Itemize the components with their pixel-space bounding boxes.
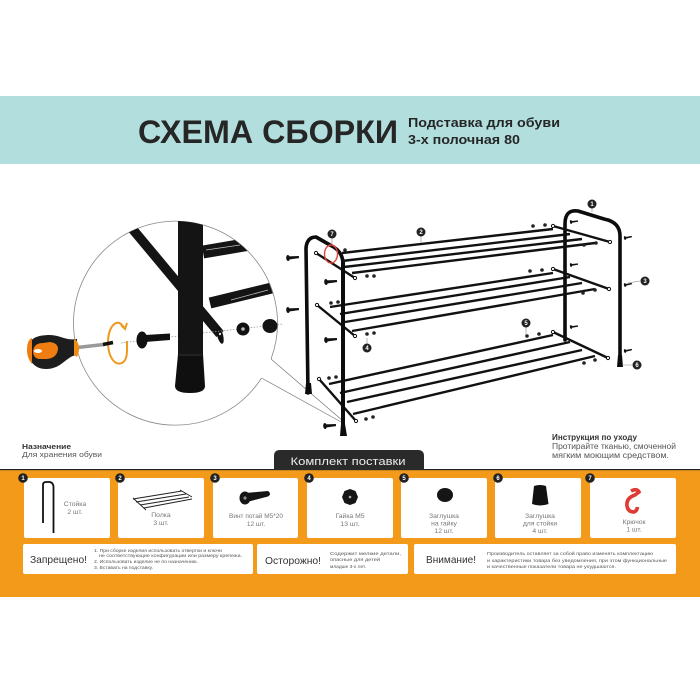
card 6: leg cap: для стойки	[523, 520, 557, 528]
magnified parts clipped to the lens	[130, 218, 276, 393]
care instructions: Протирайте тканью, смоченной	[552, 442, 676, 451]
number markers: 7	[330, 232, 334, 238]
subtitle: Подставка для обуви	[408, 115, 560, 130]
middle shelf	[317, 269, 609, 336]
card 3: screw: 3	[213, 476, 217, 482]
card 7: hook: Крючок	[623, 519, 646, 526]
number markers: 3	[643, 279, 647, 285]
card 1: upright	[18, 473, 110, 538]
subtitle: 3-х полочная 80	[408, 132, 520, 147]
card 5: nut cap: Заглушка	[429, 513, 459, 520]
notice: attention: и качественные показатели товара не ухудшаются.	[487, 564, 616, 569]
screwdriver	[27, 335, 113, 369]
nuts and caps	[327, 223, 598, 421]
notice: attention	[414, 544, 676, 574]
header band	[0, 96, 700, 164]
notice: forbidden: 2. Использовать изделие не по назначению.	[94, 559, 198, 564]
magnified detail circle	[27, 218, 343, 425]
notice: caution: младше 3-х лет.	[330, 564, 366, 570]
card 3: screw	[210, 473, 298, 538]
front upright and feet	[305, 262, 623, 436]
notice: caution: Содержит мелкие детали,	[330, 551, 401, 557]
top shelf	[316, 226, 610, 278]
number markers: 6	[635, 363, 639, 369]
rotation arrow	[108, 323, 127, 364]
notice: attention: Производитель оставляет за собой право изменять комплектацию	[487, 550, 654, 556]
card 2: shelf: 3 шт.	[153, 520, 169, 527]
number markers: 5	[524, 321, 528, 327]
title: СХЕМА СБОРКИ	[138, 114, 398, 150]
kit contents panel	[0, 450, 700, 597]
card 5: nut cap	[399, 473, 487, 538]
card 4: nut: 4	[307, 476, 311, 482]
card 4: nut: 13 шт.	[340, 521, 360, 528]
card 6: leg cap: Заглушка	[525, 513, 555, 520]
card 6: leg cap	[493, 473, 581, 538]
magnified screw	[136, 332, 170, 348]
hook	[324, 245, 338, 263]
purpose note: Назначение	[22, 442, 71, 451]
stand uprights rear	[306, 211, 620, 433]
notice: caution: опасные для детей	[330, 556, 380, 563]
card 1: upright: 2 шт.	[67, 509, 83, 516]
care instructions	[552, 433, 676, 460]
magnified cap	[262, 319, 278, 333]
purpose note: Для хранения обуви	[22, 450, 102, 459]
shoe rack diagram	[286, 200, 650, 436]
card 2: shelf: Полка	[151, 512, 171, 519]
bottom shelf	[319, 332, 608, 421]
notice: forbidden: 3. Вставать на подставку.	[94, 565, 153, 570]
notice: caution	[257, 544, 408, 574]
notice: attention: Внимание!	[426, 554, 476, 566]
card 1: upright: Стойка	[64, 500, 86, 508]
card 5: nut cap: 5	[402, 476, 406, 482]
card 6: leg cap: 4 шт.	[532, 528, 548, 535]
card 7: hook: 7	[588, 476, 592, 482]
card 4: nut: Гайка М5	[335, 512, 365, 520]
screws	[286, 219, 632, 429]
card 6: leg cap: 6	[496, 476, 500, 482]
card 2: shelf	[115, 473, 204, 538]
leader lines	[332, 208, 640, 365]
card 4: nut	[304, 473, 393, 538]
kit tab: Комплект поставки	[290, 456, 406, 468]
card 5: nut cap: на гайку	[431, 520, 457, 528]
notice: forbidden: не соответствующие конфигурации или размеру крепежа.	[99, 553, 242, 558]
dotted assembly axis	[121, 324, 283, 343]
card 7: hook	[585, 473, 676, 538]
care instructions: Инструкция по уходу	[552, 433, 638, 442]
card 7: hook: 1 шт.	[626, 526, 642, 534]
number markers	[328, 200, 650, 370]
purpose note	[22, 442, 102, 459]
notice: attention: и характеристики товара без уведомления, при этом функциональные	[487, 558, 668, 563]
magnified nut	[236, 322, 250, 336]
card 3: screw: Винт потай М5*20	[229, 512, 283, 520]
card 1: upright: 1	[21, 476, 25, 482]
card 3: screw: 12 шт.	[247, 521, 265, 528]
card 2: shelf: 2	[118, 476, 122, 482]
notice: caution: Осторожно!	[265, 555, 321, 567]
number markers: 1	[590, 202, 594, 208]
kit tab	[274, 450, 424, 470]
notice: forbidden: Запрещено!	[30, 554, 87, 566]
number markers: 4	[365, 346, 369, 352]
notice: forbidden: 1. При сборке изделия использовать отвертки и ключи	[94, 548, 222, 553]
magnified shelf bars	[130, 226, 276, 334]
magnified upright and foot	[178, 218, 203, 355]
card 5: nut cap: 12 шт.	[434, 528, 454, 535]
notice: forbidden	[23, 544, 253, 574]
shelf tube ends	[314, 224, 612, 423]
number markers: 2	[419, 230, 423, 236]
care instructions: мягким моющим средством.	[552, 451, 669, 460]
